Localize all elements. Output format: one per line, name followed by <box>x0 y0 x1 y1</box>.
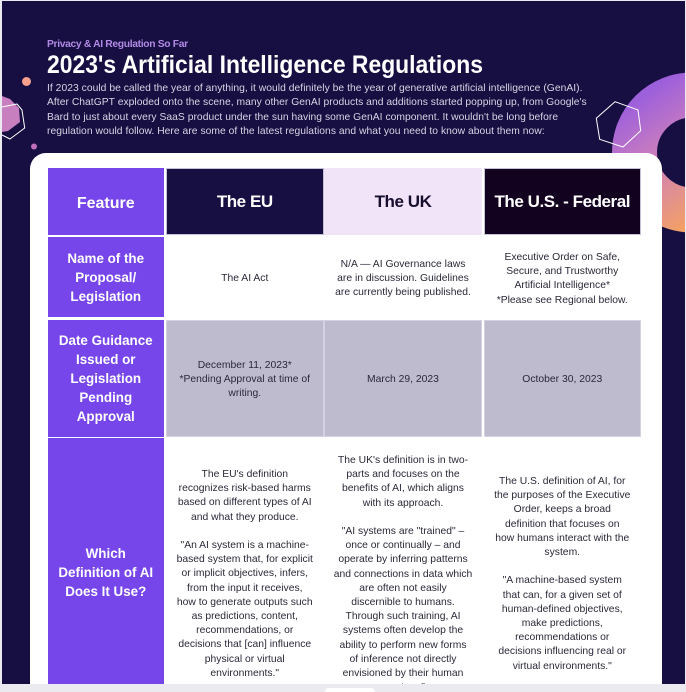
icon: pink dot <box>31 144 37 150</box>
EU definition: based system that, for explicit <box>177 554 313 565</box>
row label: Which Definition of AI <box>48 438 164 684</box>
header block <box>47 38 587 137</box>
US name: Artificial Intelligence* <box>515 280 610 291</box>
row label: Date Guidance: Date Guidance <box>59 332 153 348</box>
row label: Date Guidance: Legislation <box>70 370 141 386</box>
UK definition: benefits of AI, which aligns <box>342 483 464 494</box>
US date <box>484 320 641 436</box>
EU definition: from the input it receives, <box>187 583 303 594</box>
row label: Name of the Proposal/Legislation <box>48 237 164 317</box>
US definition: Order, keeps a broad <box>514 504 611 515</box>
US name <box>497 252 628 306</box>
EU definition: based on different types of AI <box>178 497 312 508</box>
US definition: virtual environments." <box>513 661 612 672</box>
header cell: The EU <box>166 168 324 235</box>
US definition: human-defined objectives, <box>502 604 623 615</box>
UK definition: Through such training, AI <box>346 611 460 622</box>
US definition: decisions influencing real or <box>498 646 626 657</box>
intro paragraph: Bard to just about every SaaS product under the sun having some GenAI component. It wouldn't be long before <box>47 112 558 123</box>
UK definition: ability to perform new forms <box>339 640 467 651</box>
UK definition: and connections in data which <box>334 569 472 580</box>
UK definition: envisioned by their human <box>343 668 463 679</box>
header cell: Feature <box>48 168 164 235</box>
UK definition: with its approach. <box>363 498 443 509</box>
US name: Secure, and Trustworthy <box>506 266 618 277</box>
EU date: *Pending Approval at time of <box>179 374 310 385</box>
UK definition: are often not easily <box>359 583 447 594</box>
row label: Name of the Proposal/Legislation: Name of the <box>67 250 144 266</box>
EU date <box>166 320 324 436</box>
US date: October 30, 2023 <box>522 374 602 385</box>
UK definition <box>334 455 472 684</box>
UK definition: discernible to humans. <box>351 597 455 608</box>
US definition: definition that focuses on <box>505 519 619 530</box>
UK name: N/A — AI Governance laws <box>341 259 465 270</box>
row label: Which Definition of AI: Definition of AI <box>58 564 153 580</box>
row label: Date Guidance: Pending <box>79 390 132 404</box>
icon: left hexagon outline <box>2 104 25 139</box>
US name: *Please see Regional below. <box>497 295 628 306</box>
EU definition: decisions that [can] influence <box>178 639 311 650</box>
US definition <box>494 476 630 672</box>
EU definition: The EU's definition <box>202 469 288 480</box>
UK definition: operate by inferring patterns <box>338 554 468 565</box>
EU definition: "An AI system is a machine- <box>181 540 309 551</box>
icon: salmon dot <box>22 77 31 86</box>
icon: left pink hexagon <box>2 96 20 132</box>
header cell: The UK <box>324 168 482 235</box>
UK definition: systems often develop the <box>343 625 463 636</box>
white card <box>30 153 662 684</box>
EU definition: and what they produce. <box>191 512 299 523</box>
US definition: how humans interact with the <box>495 533 629 544</box>
US definition: make predictions, <box>522 618 603 629</box>
US definition: that can, for a given set of <box>503 590 622 601</box>
icon: right hexagon outline <box>596 102 641 147</box>
EU definition <box>177 469 313 679</box>
header cell: Feature: Feature <box>77 194 135 212</box>
UK name: are in discussion. Guidelines <box>337 273 469 284</box>
header cell: The EU: The EU <box>217 192 273 211</box>
EU definition: physical or virtual <box>205 654 285 665</box>
UK definition: parts and focuses on the <box>346 469 460 480</box>
UK date <box>324 320 482 436</box>
UK name <box>335 259 471 298</box>
EU name: The AI Act <box>221 273 268 284</box>
intro paragraph: If 2023 could be called the year of anything, it would definitely be the year of generative artificial intelligence (GenAI). <box>47 83 583 94</box>
header cell: The UK: The UK <box>375 192 431 211</box>
icon: gradient ring <box>634 95 686 210</box>
eyebrow heading: Privacy & AI Regulation So Far <box>47 38 188 50</box>
US definition: "A machine-based system <box>503 575 622 586</box>
title: 2023's Artificial Intelligence Regulations <box>47 52 483 79</box>
header cell: The U.S. - Federal <box>484 168 641 235</box>
UK name: are currently being published. <box>335 287 471 298</box>
US definition: recommendations or <box>515 632 609 643</box>
row label: Date Guidance: Issued or <box>76 352 136 366</box>
row label: Date Guidance: Approval <box>77 408 135 424</box>
header cell: The U.S. - Federal: The U.S. - Federal <box>494 192 630 211</box>
UK date: March 29, 2023 <box>367 374 439 385</box>
EU definition: environments." <box>210 668 279 679</box>
US definition: The U.S. definition of AI, for <box>499 476 626 487</box>
UK definition: The UK's definition is in two- <box>338 455 468 466</box>
row label: Name of the Proposal/Legislation: Proposal/ <box>75 270 136 284</box>
EU definition: or implicit objectives, infers, <box>182 568 308 579</box>
row label: Which Definition of AI: Which <box>86 546 126 560</box>
US definition: the purposes of the Executive <box>494 490 630 501</box>
intro paragraph <box>47 83 587 137</box>
EU definition: as predictions, content, <box>192 611 298 622</box>
row label: Date Guidance <box>48 320 164 436</box>
row label: Which Definition of AI: Does It Use? <box>65 584 146 598</box>
comparison table <box>48 168 641 684</box>
UK definition: once or continually – and <box>345 540 460 551</box>
row label: Name of the Proposal/Legislation: Legislation <box>70 288 141 304</box>
bottom grey bar <box>0 684 686 689</box>
intro paragraph: After ChatGPT exploded onto the scene, many other GenAI products and additions started popping up, from Google's <box>47 97 587 108</box>
UK definition: "AI systems are "trained" – <box>342 526 464 537</box>
EU definition: recommendations, or <box>196 625 293 636</box>
US name: Executive Order on Safe, <box>504 252 620 263</box>
UK definition: of inference not directly <box>350 654 456 665</box>
EU definition: how to generate outputs such <box>177 597 313 608</box>
decorative shapes <box>2 72 685 232</box>
EU date: December 11, 2023* <box>198 360 292 371</box>
intro paragraph: regulation would follow. Here are some of the latest regulations and what you need to know about them now: <box>47 126 545 137</box>
EU date: writing. <box>228 388 261 399</box>
EU definition: recognizes risk-based harms <box>179 483 311 494</box>
US definition: system. <box>544 547 580 558</box>
